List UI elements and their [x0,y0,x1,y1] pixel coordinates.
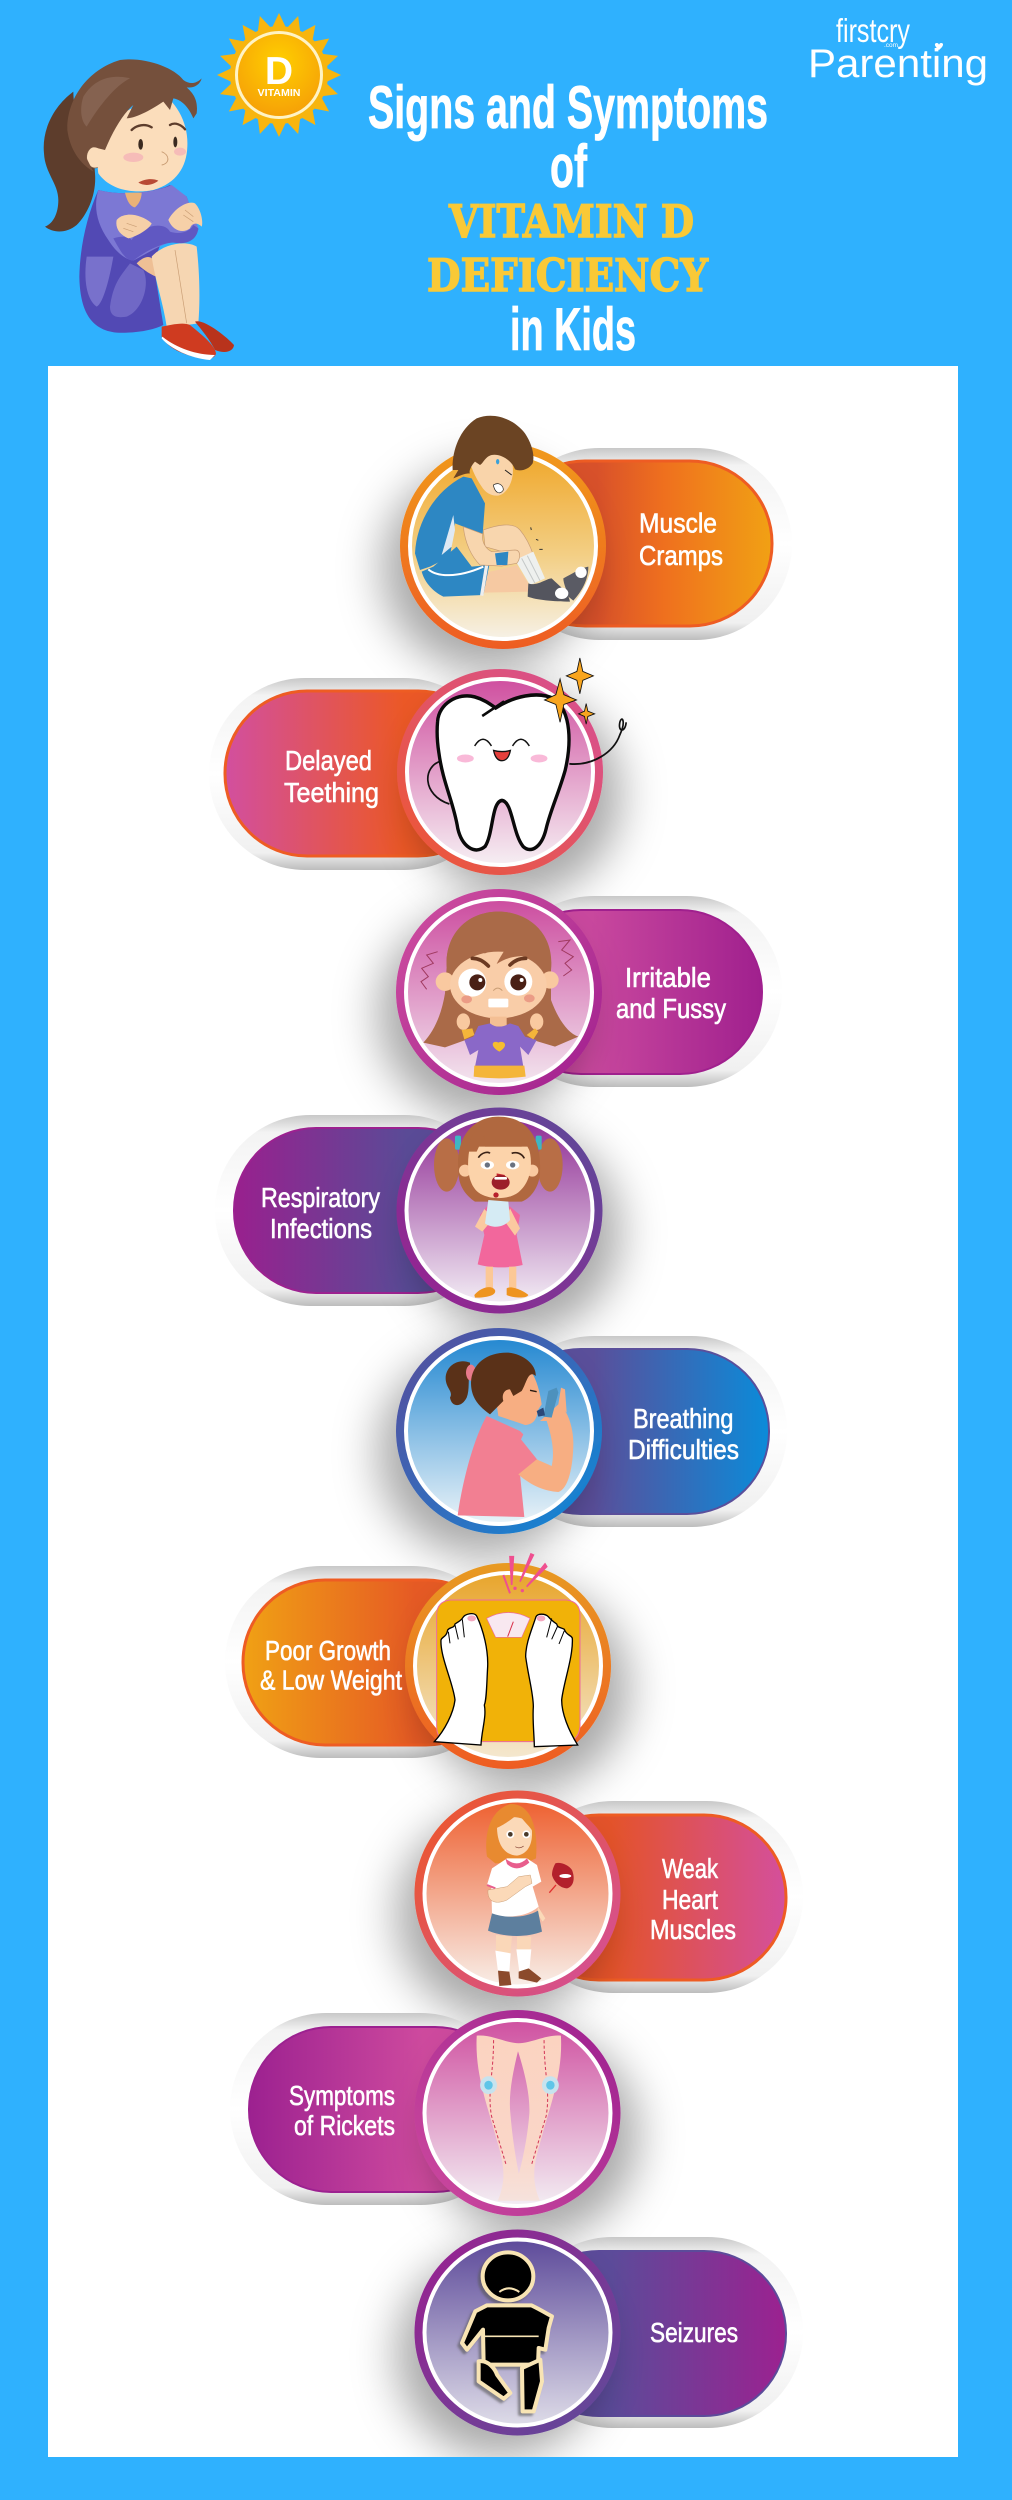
icon: boy holding leg [415,416,588,602]
label: and Fussy [616,993,726,1024]
icon: girl with nosebleed and tissue [434,1117,563,1298]
icon: sad girl sitting [44,59,234,360]
item: Symptoms of Rickets [230,2010,620,2216]
icon: bowed legs [477,2035,561,2201]
title: in Kids [510,296,636,363]
item: Irritable and Fussy [396,889,782,1095]
label [639,508,723,571]
label: of Rickets [294,2110,395,2141]
item: Delayed Teething [209,658,626,875]
logo: FirstCry Parenting [808,12,988,86]
icon: smiling tooth [428,658,626,850]
logo: FirstCry Parenting: Parenting [808,42,988,86]
title: DEFICIENCY [427,249,709,302]
item: Respiratory Infections [215,1108,602,1314]
label [628,1403,739,1465]
icon: girl with weak heart [486,1804,574,1986]
title: Signs and Symptoms [368,74,768,141]
title: VITAMIN D [448,195,694,248]
label: Weak [662,1853,719,1884]
label: Infections [270,1213,372,1244]
logo: FirstCry Parenting: .com [884,43,898,49]
icon: girl using inhaler [446,1353,573,1517]
item: Weak Heart Muscles [414,1790,803,1996]
icon: vitamin D sun: VITAMIN [258,88,300,99]
label: Irritable [625,962,711,993]
item: Poor Growth and Low Weight [225,1554,611,1769]
white content panel [48,366,958,2457]
icon: vitamin D sun: D [265,50,293,93]
label [260,1635,402,1696]
label: Muscle [639,508,717,538]
label: Teething [284,777,379,808]
label: Poor Growth [265,1635,391,1666]
item: Seizures [414,2230,803,2436]
label [261,1182,380,1244]
title [368,74,768,363]
bottom blue border [0,2457,1012,2500]
label [284,745,379,808]
label: Heart [662,1884,718,1915]
label: Seizures [650,2317,738,2348]
label: Difficulties [628,1434,739,1465]
label: & Low Weight [260,1664,402,1696]
label [650,1853,736,1945]
item: Breathing Difficulties [396,1328,787,1534]
label: Breathing [633,1403,734,1434]
icon: feet on weighing scale [434,1554,580,1747]
item: Muscle Cramps [400,416,792,649]
label: Muscles [650,1914,736,1945]
icon: child having a seizure [462,2252,552,2411]
label: Cramps [639,540,723,571]
label [616,962,726,1024]
title: of [550,133,588,200]
icon: vitamin D sun [217,13,341,137]
label: Delayed [285,745,372,776]
label: Symptoms [289,2080,395,2111]
label: Respiratory [261,1182,380,1213]
logo: FirstCry Parenting: firstcry [836,12,910,49]
icon: angry girl [421,912,578,1078]
label [289,2080,395,2141]
